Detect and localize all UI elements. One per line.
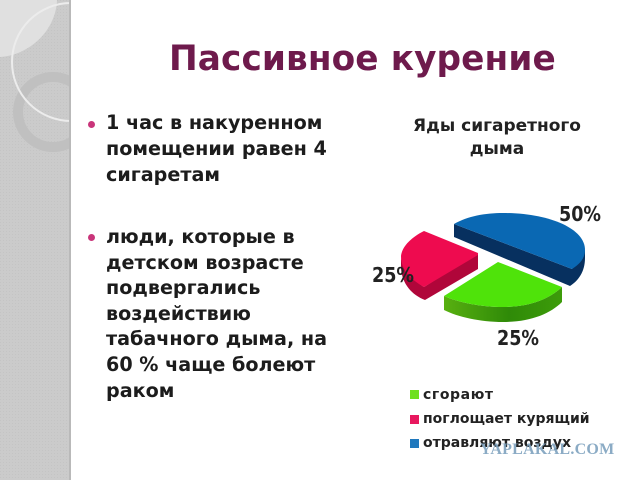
bullet 2 text: табачного дыма, на: [106, 327, 327, 350]
chart title: [413, 116, 581, 159]
red slice: [401, 231, 478, 300]
legend swatch: green: [410, 390, 419, 399]
bullet 1 marker: [88, 120, 95, 128]
bullet 2 marker: [88, 234, 95, 240]
bullet 2 text: люди, которые в: [106, 225, 295, 248]
bullet 1 text: 1 час в накуренном: [106, 111, 322, 134]
legend: [410, 387, 590, 451]
label 25% bottom: 25%: [497, 326, 539, 350]
legend label: red: поглощает курящий: [423, 411, 590, 427]
bullet 2 text: 60 % чаще болеют: [106, 353, 315, 376]
title: Пассивное курение: [169, 39, 556, 79]
label 50%: 50%: [559, 202, 601, 226]
bullet 1 text: сигаретам: [106, 163, 220, 186]
chart title: Яды сигаретного: [413, 116, 581, 136]
bullet 2 text: [106, 225, 327, 402]
legend swatch: red: [410, 415, 419, 424]
blue slice: [454, 213, 585, 286]
legend swatch: blue: [410, 439, 419, 448]
bullet 2 text: подвергались: [106, 276, 260, 299]
bullet 2 text: детском возрасте: [106, 251, 304, 274]
decorative side band with circles: [0, 0, 71, 480]
bullet 1 text: [106, 111, 327, 186]
bullet 2 text: раком: [106, 379, 174, 402]
bullet 2 text: воздействию: [106, 302, 251, 325]
legend label: green: сгорают: [423, 387, 494, 403]
chart title: дыма: [470, 139, 524, 159]
legend label: blue: отравляют воздух: [423, 435, 571, 451]
watermark: YAPLAKAL.COM: [480, 441, 614, 458]
label 25% left: 25%: [372, 263, 414, 287]
green slice: [444, 262, 562, 322]
bullet 1 text: помещении равен 4: [106, 137, 327, 160]
bullet list: [88, 111, 327, 402]
